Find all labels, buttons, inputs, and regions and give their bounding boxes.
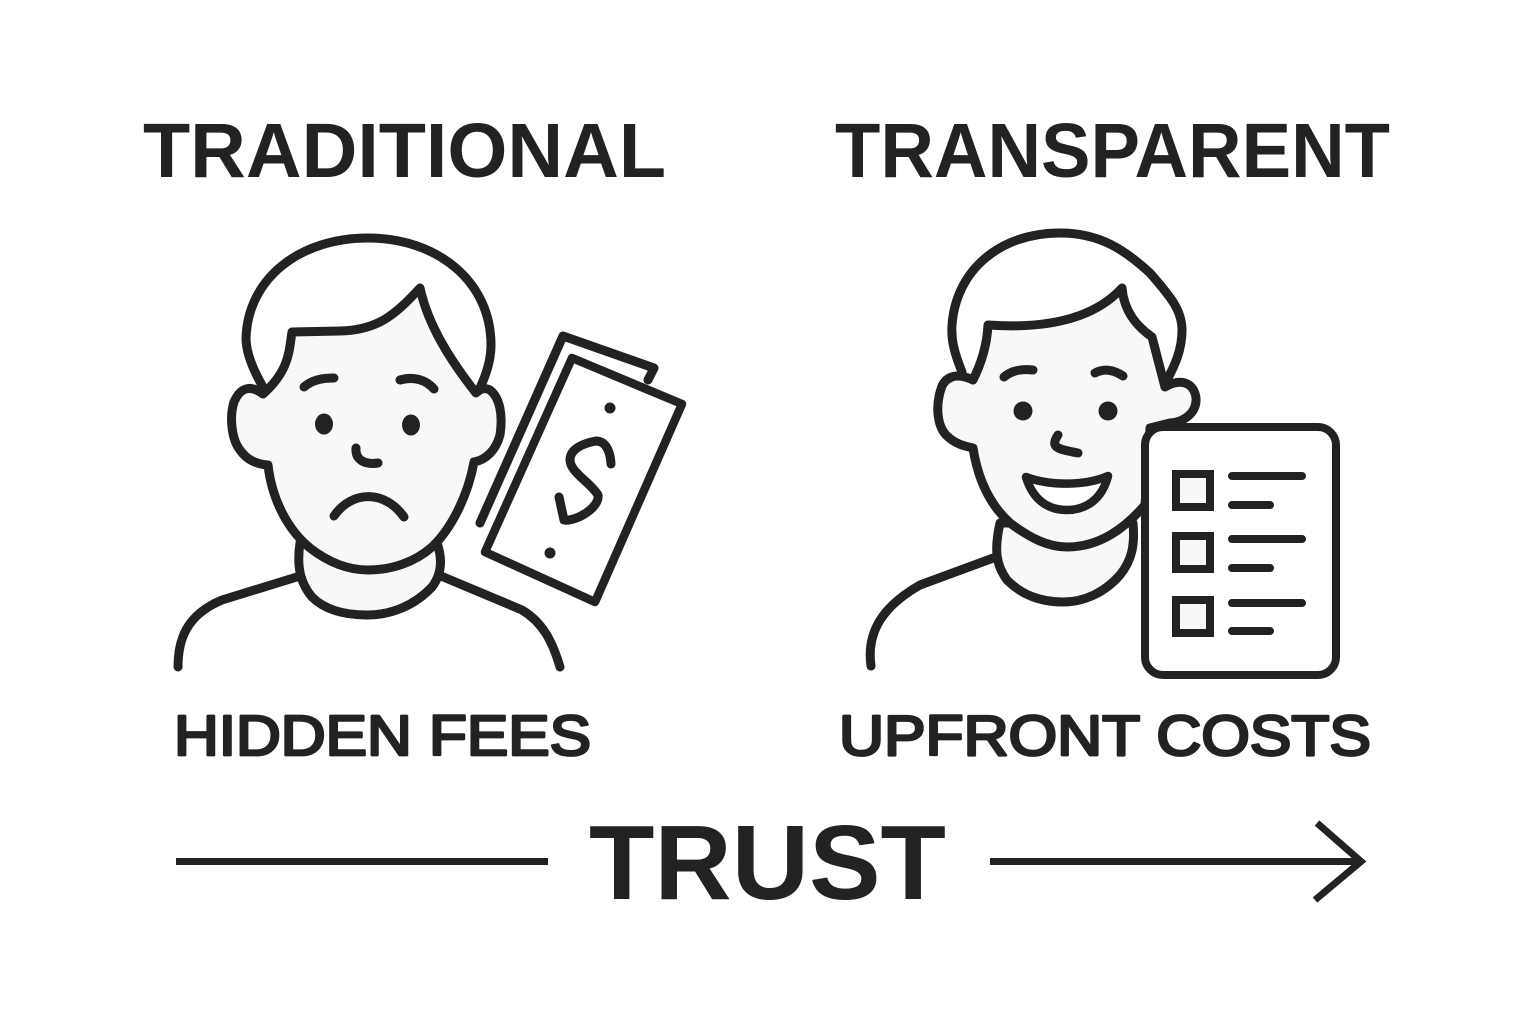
document outline bbox=[1145, 427, 1336, 675]
label: hidden fees: HIDDEN FEES bbox=[174, 704, 591, 768]
dollar sign bbox=[559, 441, 611, 520]
neck bbox=[299, 543, 440, 615]
icon: worried person bbox=[178, 238, 560, 667]
icon: happy person bbox=[870, 233, 1196, 666]
right eye bbox=[402, 414, 420, 436]
shoulder bbox=[870, 557, 996, 666]
label: upfront costs: UPFRONT COSTS bbox=[839, 704, 1371, 768]
hair outline bbox=[952, 233, 1182, 380]
heading: traditional: TRADITIONAL bbox=[143, 108, 666, 194]
folded back of bill bbox=[480, 336, 654, 523]
face and ears bbox=[232, 288, 501, 570]
heading: transparent: TRANSPARENT bbox=[835, 108, 1390, 194]
left eyebrow bbox=[304, 378, 334, 387]
left eye bbox=[1014, 402, 1032, 420]
corner dot bbox=[604, 402, 616, 414]
left eyebrow bbox=[1004, 370, 1033, 377]
right eye bbox=[1098, 402, 1118, 420]
sad mouth bbox=[334, 497, 404, 517]
right shoulder bbox=[441, 576, 560, 667]
neck bbox=[997, 523, 1134, 602]
bill front bbox=[485, 358, 682, 602]
hair outline bbox=[246, 238, 491, 392]
checkbox 2 bbox=[1176, 536, 1210, 569]
face and ears bbox=[938, 288, 1196, 547]
right eyebrow bbox=[400, 378, 434, 389]
list lines bbox=[1232, 476, 1302, 631]
arrow: toward trust bbox=[990, 823, 1361, 900]
nose bbox=[356, 448, 378, 463]
nose bbox=[1055, 435, 1078, 453]
left eye bbox=[315, 414, 333, 434]
smile bbox=[1026, 476, 1108, 510]
right eyebrow bbox=[1095, 370, 1123, 376]
left trust line bbox=[176, 858, 548, 865]
trust label: TRUST bbox=[589, 804, 946, 922]
checkbox 1 bbox=[1176, 474, 1210, 507]
icon: dollar bill bbox=[480, 336, 682, 602]
left shoulder bbox=[178, 576, 300, 667]
checkbox 3 bbox=[1176, 600, 1210, 633]
corner dot bbox=[544, 548, 556, 558]
icon: checklist document bbox=[1145, 427, 1336, 675]
